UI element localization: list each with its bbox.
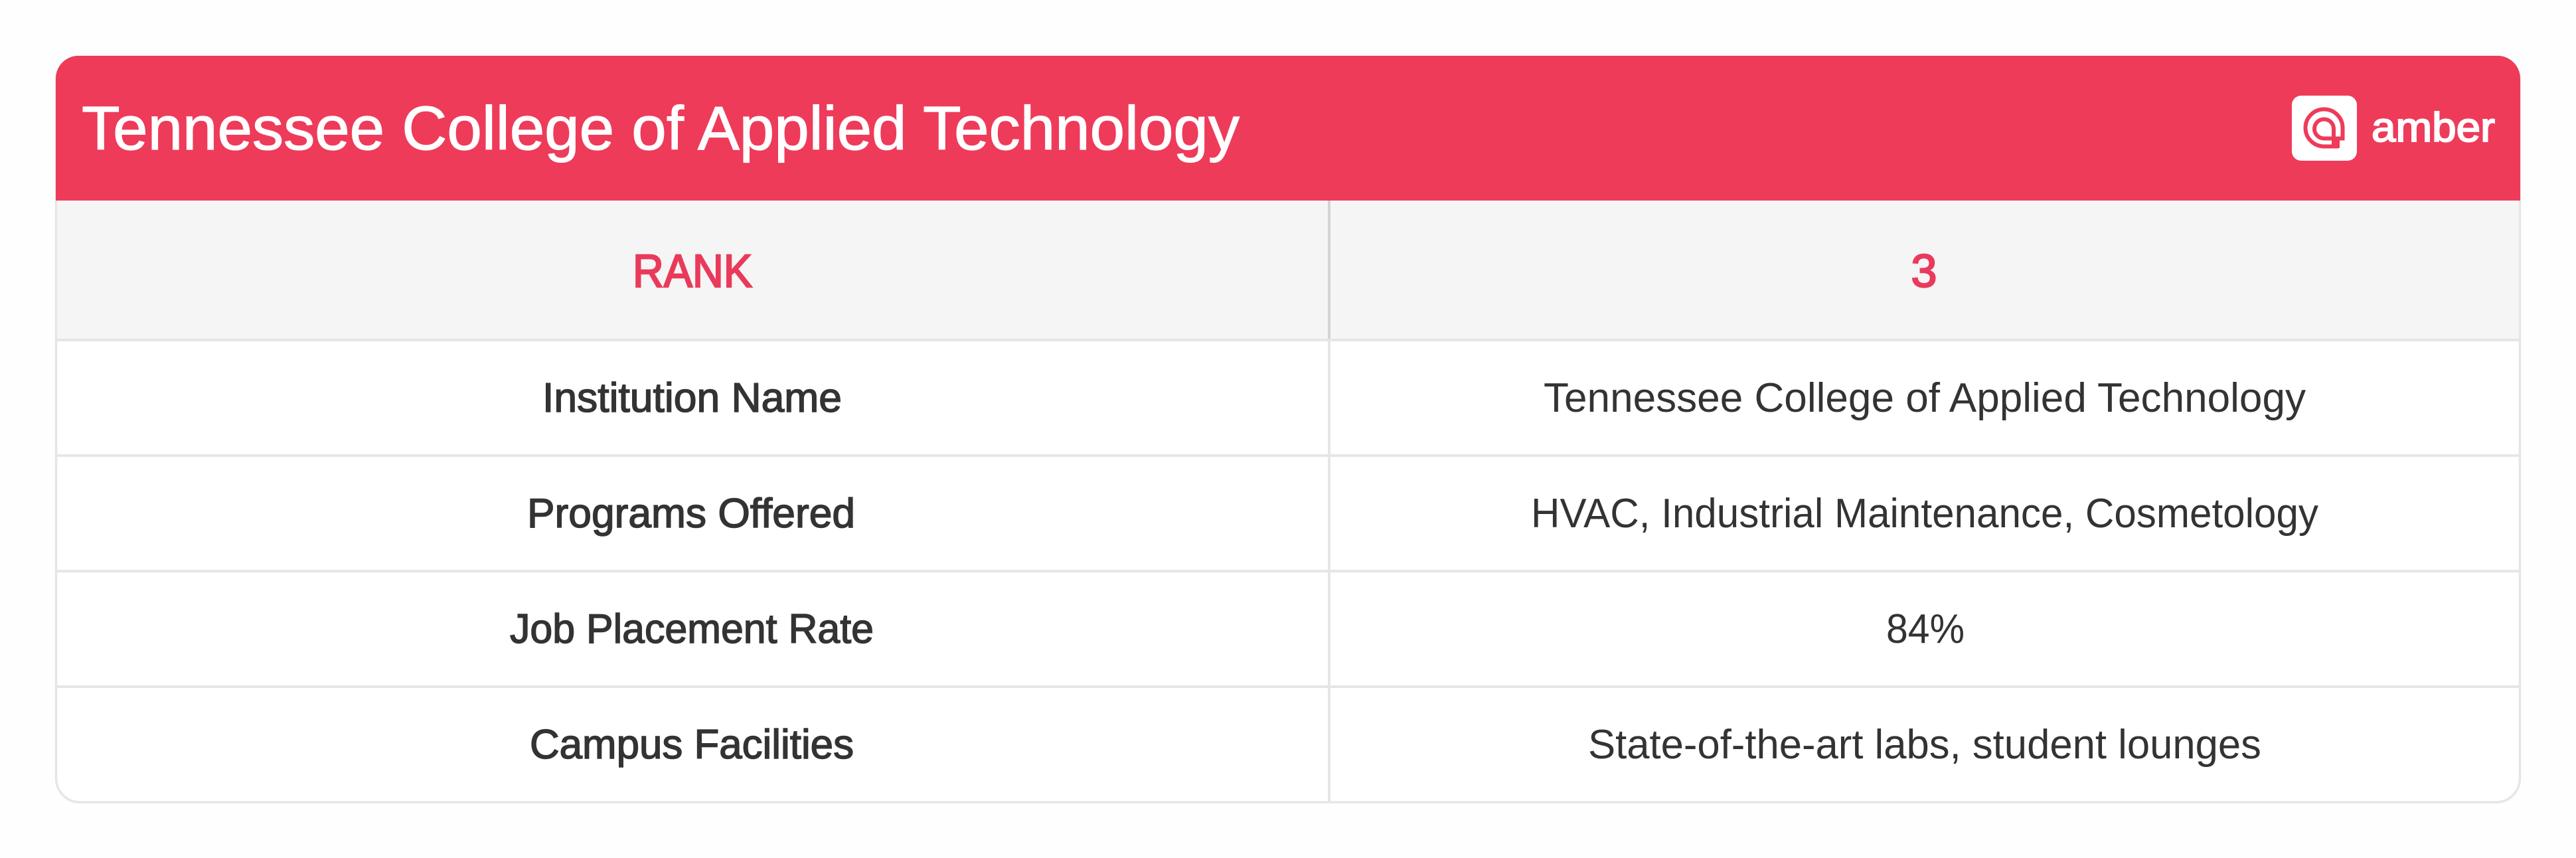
label: Campus Facilities: [530, 722, 854, 768]
label: Institution Name: [542, 375, 842, 421]
value: HVAC, Industrial Maintenance, Cosmetology: [1531, 491, 2318, 537]
row: institution name: [542, 375, 2306, 421]
rank row background: [57, 201, 2519, 339]
rank row: [633, 245, 1937, 297]
value: Tennessee College of Applied Technology: [1544, 375, 2306, 421]
header band: [56, 56, 2520, 201]
wordmark: amber: [2372, 105, 2495, 151]
row: campus facilities: [530, 722, 2261, 768]
rank label: RANK: [633, 245, 752, 297]
label: Programs Offered: [527, 491, 855, 537]
logo: amber: [2292, 96, 2495, 161]
row: programs offered: [527, 491, 2318, 537]
value: 84%: [1886, 606, 1965, 652]
icon: amber mark: [2292, 96, 2357, 161]
value: State-of-the-art labs, student lounges: [1588, 722, 2261, 768]
title: Tennessee College of Applied Technology: [82, 94, 1240, 163]
label: Job Placement Rate: [510, 606, 874, 652]
rank value: 3: [1911, 245, 1937, 297]
row: job placement rate: [510, 606, 1965, 652]
